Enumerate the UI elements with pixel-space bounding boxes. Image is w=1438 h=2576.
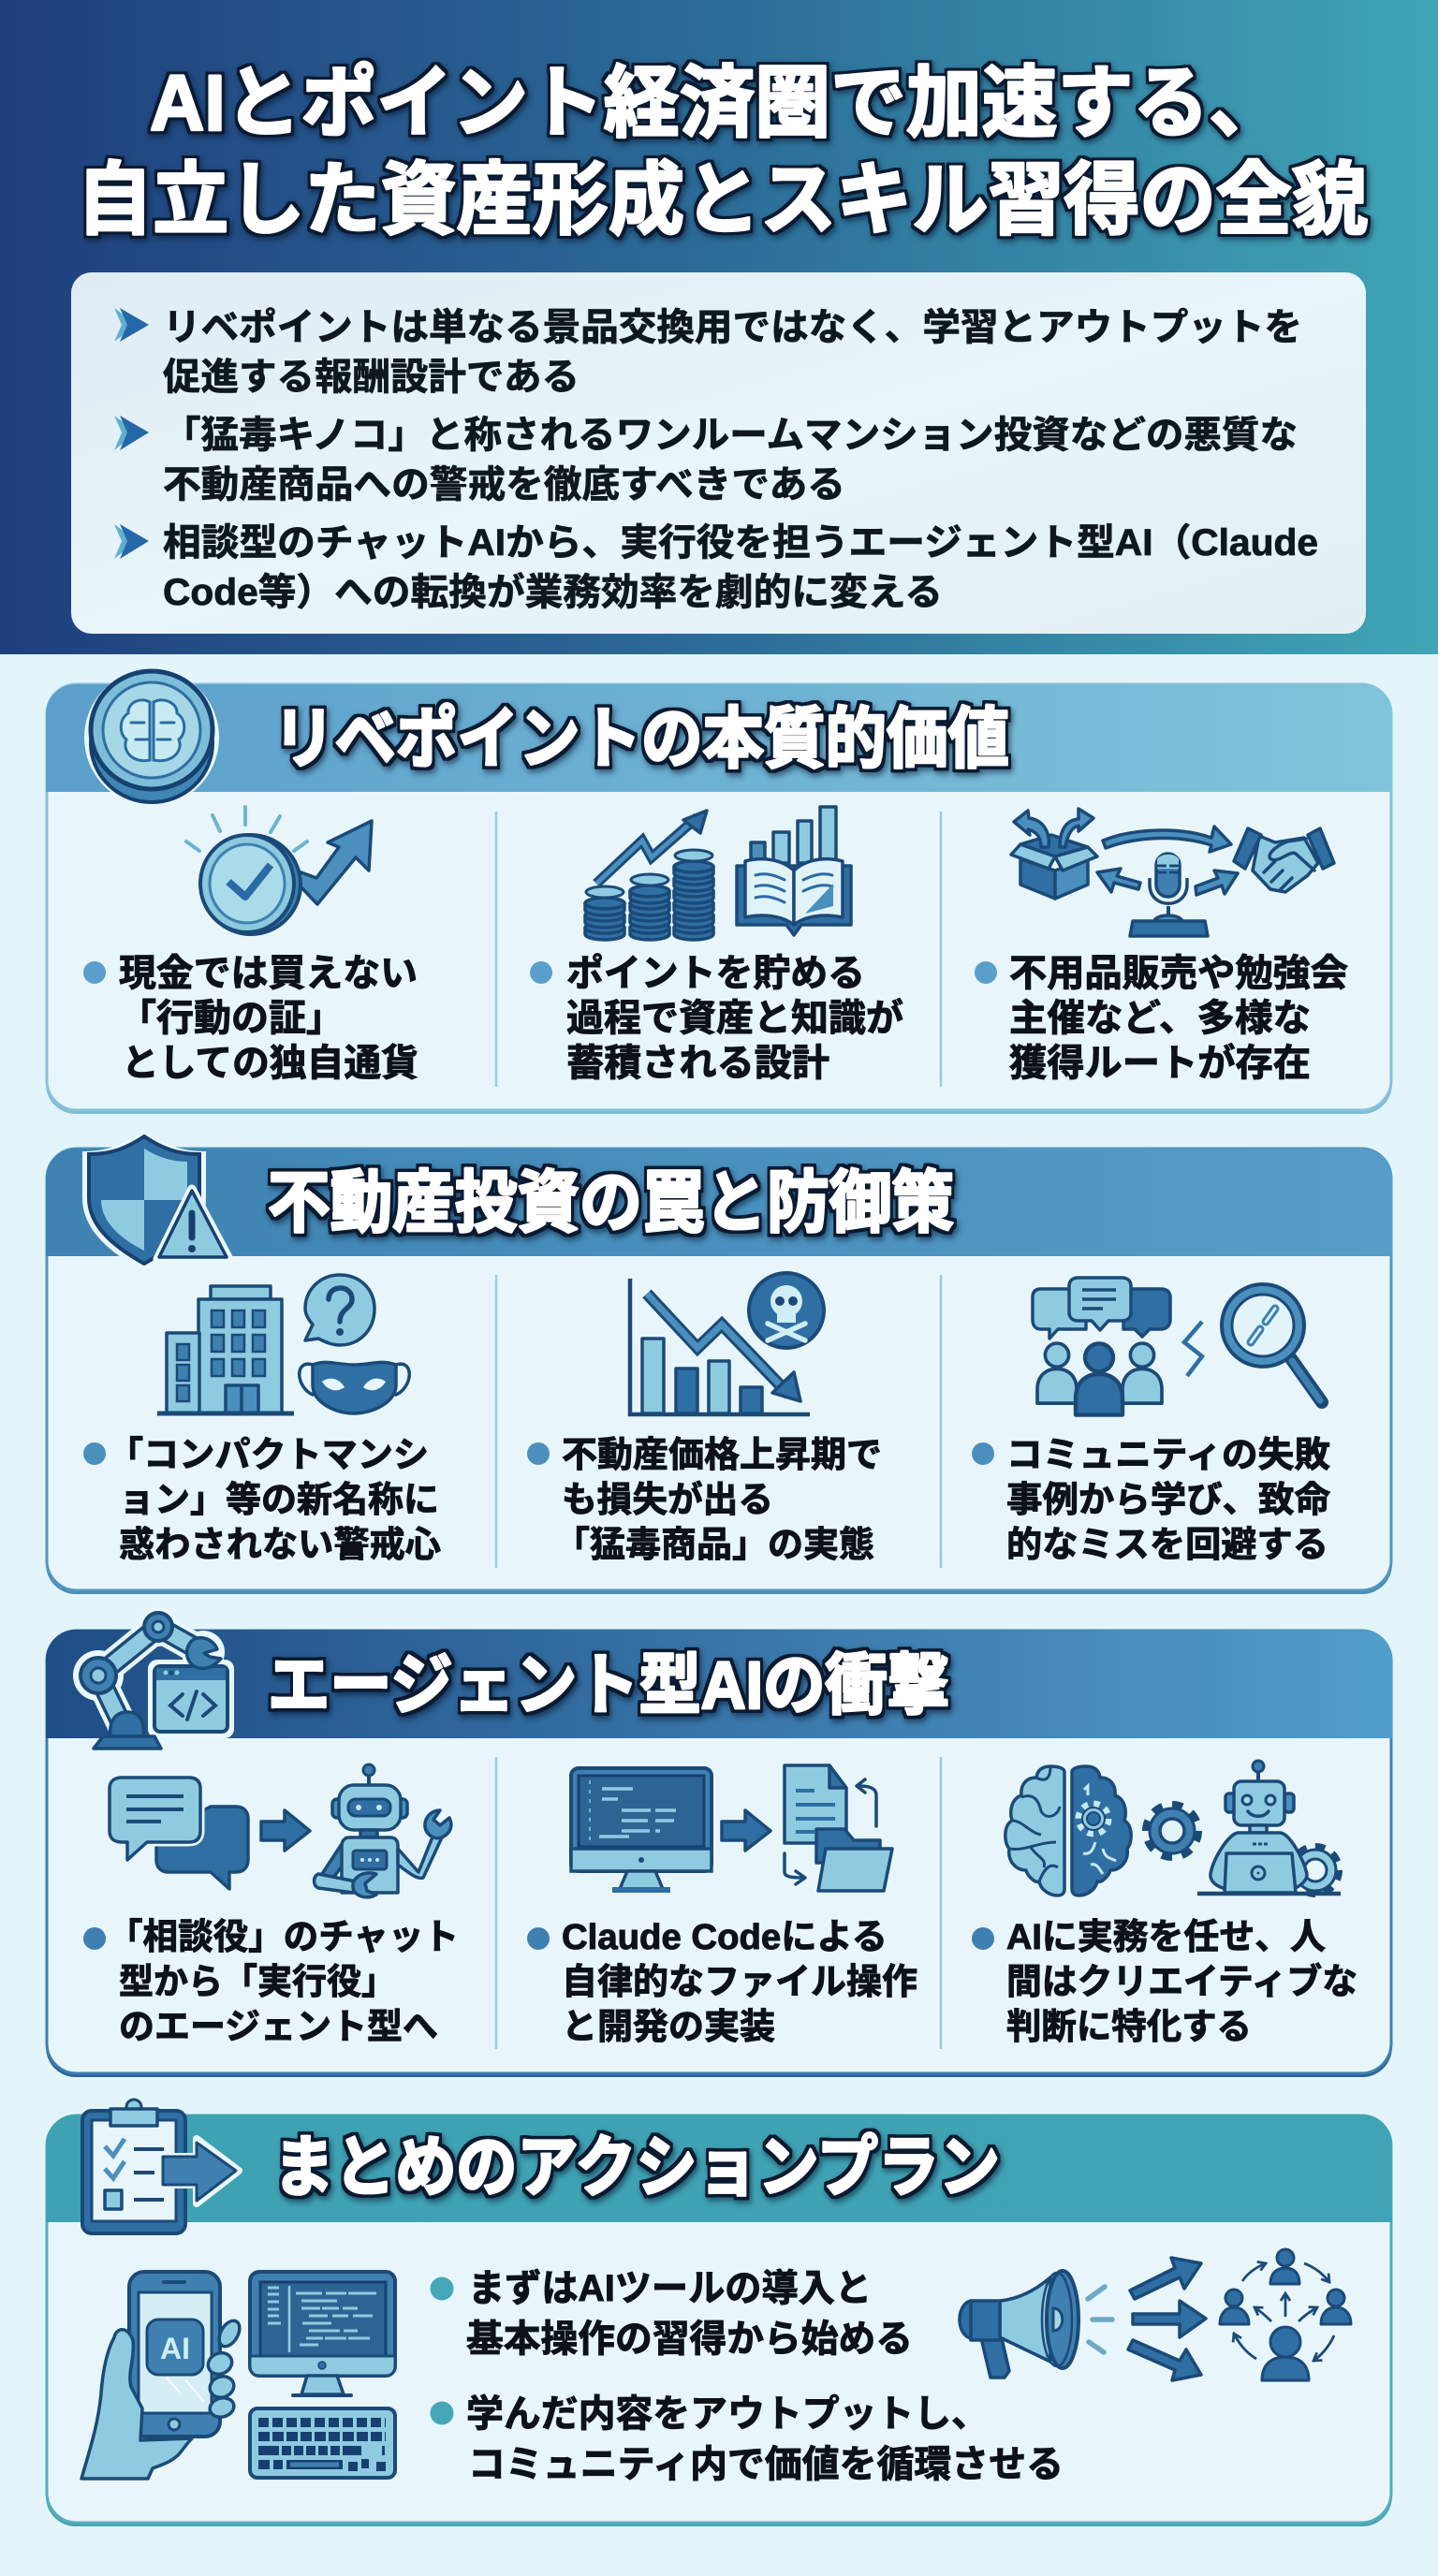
heading: まとめのアクションプラン (273, 2130, 1000, 2205)
bullet and text column 1: ョン」等の新名称に (119, 1481, 439, 1520)
bullet and text column 2: と開発の実装 (562, 2008, 775, 2047)
bullet and text column 1: 「コンパクトマンシ (108, 1436, 429, 1475)
bullet and text column 2: も損失が出る (562, 1481, 773, 1520)
bullet and text column 1 (83, 1436, 441, 1565)
bullet and text column 1: 現金では買えない (119, 953, 418, 994)
bullet and text column 2 (530, 953, 903, 1084)
icon: falling chart with skull (630, 1273, 824, 1414)
summary point 2 (163, 415, 1298, 505)
icon: community circle of people (1220, 2249, 1351, 2380)
summary point 1 (163, 307, 1302, 398)
icon: coins, growth arrow and book (585, 807, 851, 940)
summary point 3 (163, 522, 1318, 613)
bullet and text column 2 (527, 1918, 917, 2047)
bullet and text column 3 (972, 1436, 1330, 1565)
bullet and text 2 (431, 2393, 1064, 2485)
panel: まとめのアクションプラン (46, 2100, 1392, 2526)
title: 自立した資産形成とスキル習得の全貌 (77, 155, 1368, 244)
bullet and text column 2: 自律的なファイル操作 (562, 1963, 917, 2002)
panel: 不動産投資の罠と防御策 (46, 1131, 1392, 1594)
bullet and text column 2: 蓄積される設計 (566, 1043, 829, 1084)
column dividers (496, 1275, 941, 1568)
heading: 不動産投資の罠と防御策 (268, 1164, 954, 1241)
bullet and text column 3: AIに実務を任せ、人 (1006, 1918, 1326, 1957)
summary point 3: Code等）への転換が業務効率を劇的に変える (163, 572, 943, 613)
summary panel (71, 272, 1366, 634)
icon: shield with warning triangle (82, 1131, 229, 1271)
bullet and text column 2: 「猛毒商品」の実態 (554, 1526, 874, 1565)
column dividers (496, 812, 941, 1087)
bullet and text column 1: 惑わされない警戒心 (119, 1526, 441, 1565)
bullet and text column 3: 的なミスを回避する (1006, 1526, 1328, 1565)
bullet and text column 1 (83, 953, 418, 1084)
heading: リベポイントの本質的価値 (273, 702, 1009, 777)
bullet and text column 2: Claude Codeによる (562, 1918, 888, 1957)
bullet and text column 2: ポイントを貯める (566, 953, 865, 994)
icon: desktop monitor (250, 2272, 395, 2395)
column dividers (496, 1757, 941, 2049)
bullet and text column 2: 過程で資産と知識が (566, 998, 903, 1039)
icon: coin with check and rising arrow (186, 807, 372, 934)
icon: megaphone (960, 2271, 1112, 2378)
icon: brain, gear and robot with laptop (1005, 1761, 1341, 1895)
icon: arrow bullet 2 (114, 416, 149, 450)
bullet and text column 3: 獲得ルートが存在 (1009, 1043, 1311, 1084)
summary point 2: 不動産商品への警戒を徹底すべきである (163, 464, 845, 505)
bullet and text column 3: 判断に特化する (1006, 2008, 1252, 2047)
bullet and text column 3: 事例から学び、致命 (1006, 1481, 1330, 1520)
bullet and text column 1: としての独自通貨 (122, 1043, 418, 1084)
bullet and text column 3 (972, 1918, 1357, 2047)
icon: code monitor to files (571, 1765, 892, 1893)
icon: robot arm with code window (73, 1607, 234, 1749)
icon: building, question bubble and mask (157, 1275, 409, 1413)
icon: community and magnifier (1033, 1278, 1322, 1415)
bullet and text 1 (431, 2268, 913, 2360)
bullet and text column 3: コミュニティの失敗 (1006, 1436, 1330, 1475)
icon: arrow bullet 1 (114, 308, 149, 342)
icon: hand holding AI phone: AI (160, 2332, 190, 2365)
icon: box, microphone and handshake routes (1011, 809, 1334, 936)
summary point 1: リベポイントは単なる景品交換用ではなく、学習とアウトプットを (163, 307, 1302, 348)
title (77, 60, 1368, 244)
icon: checklist clipboard and arrow (82, 2100, 239, 2233)
summary point 1: 促進する報酬設計である (163, 357, 580, 398)
bullet and text column 3: 間はクリエイティブな (1006, 1962, 1357, 2002)
icon: arrow bullet 3 (114, 524, 149, 559)
icon: keyboard (250, 2408, 395, 2478)
bullet and text 2: コミュニティ内で価値を循環させる (468, 2444, 1064, 2485)
heading: エージェント型AIの衝撃 (268, 1648, 949, 1723)
bullet and text column 3 (975, 953, 1348, 1084)
summary point 2: 「猛毒キノコ」と称されるワンルームマンション投資などの悪質な (163, 415, 1298, 456)
panel: エージェント型AIの衝撃 (46, 1607, 1392, 2077)
summary point 3: 相談型のチャットAIから、実行役を担うエージェント型AI（Claude (163, 522, 1318, 564)
bullet and text 2: 学んだ内容をアウトプットし、 (466, 2393, 989, 2435)
icon: three broadcast arrows (1128, 2258, 1206, 2380)
icon: hand holding AI phone (81, 2272, 243, 2479)
icon: chat to robot (110, 1764, 451, 1897)
icon: brain coin (84, 669, 219, 806)
bullet and text column 3: 主催など、多様な (1009, 998, 1311, 1039)
bullet and text column 1: 型から「実行役」 (119, 1963, 396, 2002)
bullet and text 1: 基本操作の習得から始める (466, 2319, 913, 2360)
bullet and text column 2: 不動産価格上昇期で (562, 1436, 882, 1475)
panel: リベポイントの本質的価値 (46, 669, 1392, 1114)
bullet and text column 1: のエージェント型へ (119, 2008, 438, 2047)
bullet and text column 1: 「行動の証」 (119, 998, 344, 1039)
bullet and text 1: まずはAIツールの導入と (468, 2268, 872, 2309)
title: AIとポイント経済圏で加速する、 (150, 60, 1284, 147)
bullet and text column 1: 「相談役」のチャット (108, 1918, 459, 1957)
bullet and text column 1 (83, 1918, 459, 2047)
bullet and text column 2 (527, 1436, 882, 1565)
bullet and text column 3: 不用品販売や勉強会 (1009, 953, 1348, 994)
